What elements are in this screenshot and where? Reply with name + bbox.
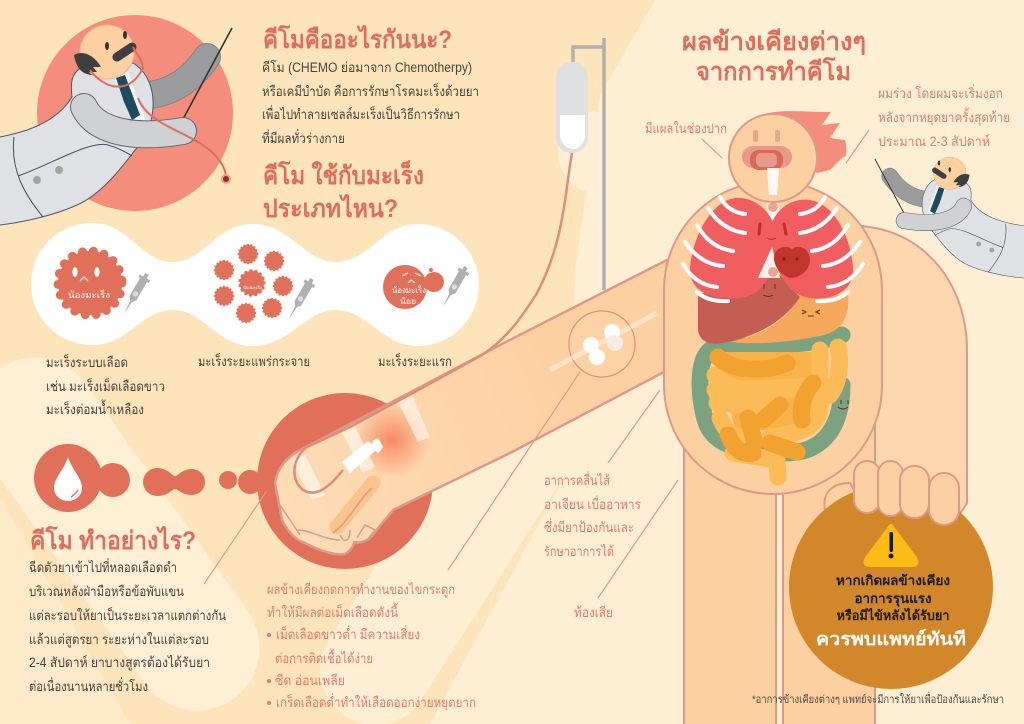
text: how chemo works: บริเวณหลังฝ่ามือหรือข้อพับแขน — [29, 584, 184, 599]
text: warning — [816, 573, 966, 649]
label: blood cancer: มะเร็งต่อมน้ำเหลือง — [46, 399, 144, 417]
illustration: right arm and lower body — [684, 226, 967, 724]
heading: cancer types: คีโม ใช้กับมะเร็ง — [263, 160, 424, 190]
text: how chemo works: แต่ละรอบให้ยาเป็นระยะเวลาแตกต่างกัน — [29, 606, 226, 623]
cancer: metastatic: น้องมะเร็ง — [243, 284, 262, 290]
label: hair loss — [878, 84, 1010, 149]
label: hair loss: ประมาณ 2-3 สัปดาห์ — [878, 133, 990, 149]
label: hair loss: ผมร่วง โดยผมจะเริ่มงอก — [878, 84, 1003, 101]
icon: warning triangle — [866, 526, 916, 565]
heading: how chemo works: คีโม ทำอย่างไร? — [30, 525, 196, 555]
organ: lungs — [690, 198, 853, 299]
text: how chemo works: 2-4 สัปดาห์ ยาบางสูตรต้องได้รับยา — [29, 654, 210, 671]
text: what is chemo — [262, 59, 479, 146]
heading: side effects: จากการทำคีโม — [696, 56, 851, 86]
heading: cancer types: ประเภทไหน? — [263, 193, 398, 223]
organ: large intestine — [700, 335, 842, 453]
illustration: arm with IV and hand — [275, 153, 667, 554]
text: how chemo works: ต่อเนื่องนานหลายชั่วโมง — [29, 677, 148, 694]
illustration: head with hair — [729, 111, 846, 202]
label: bone marrow: ซีด อ่อนเพลีย — [275, 673, 345, 688]
text: how chemo works — [29, 558, 226, 694]
cancer: blood: น้องมะเร็ง — [68, 288, 110, 300]
illustration: red circle behind hand — [257, 393, 433, 569]
panel: cancer types blob — [31, 223, 479, 346]
text: how chemo works: แล้วแต่สูตรยา ระยะห่างในแต่ละรอบ — [29, 631, 209, 648]
heading: side effects: ผลข้างเคียงต่างๆ — [682, 28, 866, 56]
label: nausea: รักษาอาการได้ — [544, 544, 614, 559]
label: bone marrow: เกร็ดเลือดต่ำทำให้เลือดออกง่ายหยุดยาก — [276, 693, 476, 711]
heading: side effects — [682, 28, 866, 86]
illustration: small doctor — [875, 157, 1024, 279]
label: blood cancer: เช่น มะเร็งเม็ดเลือดขาว — [46, 377, 165, 394]
text: warning: ควรพบแพทย์ทันที — [816, 628, 966, 649]
organ: liver and stomach — [730, 295, 848, 343]
organ: esophagus — [767, 168, 779, 230]
text: how chemo works: ฉีดตัวยาเข้าไปที่หลอดเลือดดำ — [29, 558, 177, 575]
label: diarrhea: ท้องเสีย — [574, 605, 613, 620]
label: nausea — [544, 471, 641, 559]
label: early stage cancer: มะเร็งระยะแรก — [378, 352, 452, 369]
text: what is chemo: หรือเคมีบำบัด คือการรักษาโรคมะเร็งด้วยยา — [262, 82, 479, 99]
label: mouth sores: มีแผลในช่องปาก — [645, 120, 727, 136]
cancer: blood — [58, 251, 152, 317]
heading: cancer types — [263, 160, 424, 223]
text: warning: หรือมีไข้หลังได้รับยา — [836, 607, 950, 623]
illustration: IV stand and bag — [556, 38, 604, 290]
label: blood cancer — [46, 353, 165, 417]
organ: heart — [774, 247, 810, 278]
cancer: early stage — [383, 264, 471, 310]
label: bone marrow: ต่อการติดเชื้อได้ง่าย — [275, 648, 373, 666]
illustration: torso — [664, 168, 882, 494]
text: warning: หากเกิดผลข้างเคียง — [836, 573, 950, 588]
label: metastatic cancer: มะเร็งระยะแพร่กระจาย — [198, 352, 310, 369]
label: nausea: อาการคลื่นไส้ — [544, 471, 610, 488]
label: bone marrow: ทำให้มีผลต่อเม็ดเลือดดังนี้ — [267, 602, 398, 620]
leader lines — [204, 130, 869, 598]
label: bone marrow: ผลข้างเคียงกดการทำงานของไขกระดูก — [267, 582, 455, 598]
heading: what is chemo: คีโมคืออะไรกันนะ? — [263, 24, 452, 54]
cancer: metastatic — [215, 245, 317, 322]
icon: blood drop with bubbles — [34, 444, 262, 512]
text: what is chemo: เพื่อไปทำลายเซลล์มะเร็งเป็นวิธีการรักษา — [262, 105, 460, 122]
label: nausea: อาเจียน เบื่ออาหาร — [544, 495, 641, 512]
label: blood cancer: มะเร็งระบบเลือด — [46, 353, 128, 370]
text: what is chemo: ที่มีผลทั่วร่างกาย — [262, 129, 345, 146]
cancer: early stage: น้อย — [400, 297, 416, 306]
illustration: doctor with stethoscope — [0, 15, 233, 228]
organ: small intestine — [715, 347, 840, 477]
label: nausea: ซึ่งมียาป้องกันและ — [544, 518, 634, 535]
text: warning: อาการรุนแรง — [854, 591, 932, 607]
illustration: blood cells magnifier — [550, 311, 657, 377]
organ: ribs — [683, 197, 863, 301]
label: bone marrow: เม็ดเลือดขาวต่ำ มีความเสี่ยง — [276, 625, 420, 642]
illustration: warning hand — [789, 461, 993, 689]
label: bone marrow — [267, 582, 476, 711]
organ faces — [763, 284, 848, 409]
text: what is chemo: คีโม (CHEMO ย่อมาจาก Chemotherpy) — [262, 59, 472, 75]
cancer: early stage: น้องมะเร็ง — [392, 285, 426, 295]
